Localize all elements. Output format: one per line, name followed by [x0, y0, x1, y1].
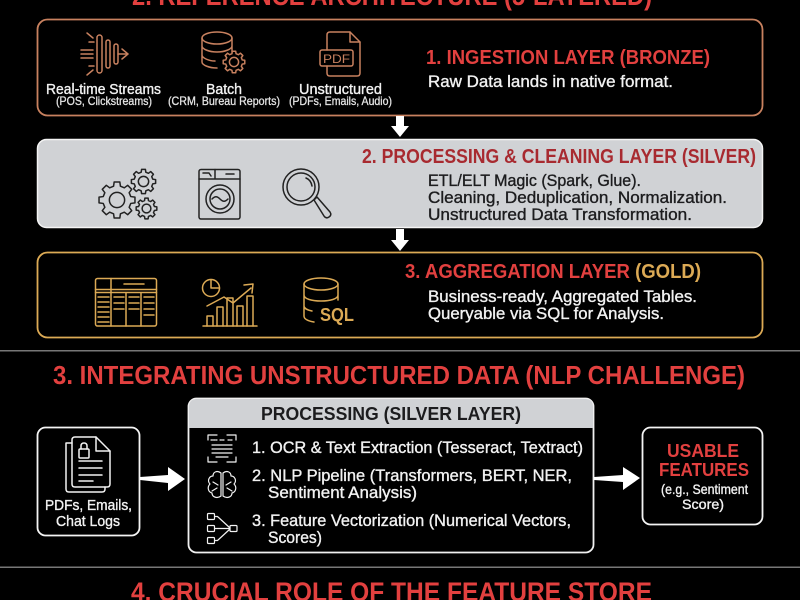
- example: sentiment score: [661, 481, 748, 512]
- step: ocr: 1. OCR & Text Extraction (Tesseract, Textract): [252, 439, 583, 457]
- step: nlp pipeline: 2. NLP Pipeline (Transformers, BERT, NER,: [252, 467, 572, 485]
- icon: gears: [99, 169, 157, 219]
- title: processing and cleaning layer: 2. PROCESSING & CLEANING LAYER (SILVER): [362, 146, 756, 168]
- title: usable features: FEATURES: [659, 459, 749, 480]
- step: feature vectorization: Scores): [268, 529, 322, 547]
- icon: growth chart: [202, 280, 257, 326]
- header text: PROCESSING (SILVER LAYER): [261, 403, 521, 424]
- arrow: ingestion to processing: [391, 116, 409, 137]
- heading: integrating unstructured data: 3. INTEGRATING UNSTRUCTURED DATA (NLP CHALLENGE): [53, 360, 745, 390]
- icon text: pdf: PDF: [323, 52, 350, 66]
- step: feature vectorization: 3. Feature Vectorization (Numerical Vectors,: [252, 512, 571, 530]
- panel: aggregation layer: [38, 252, 762, 338]
- title: usable features: USABLE: [667, 440, 739, 461]
- panel: usable features: [642, 428, 762, 524]
- arrow: processing to features: [594, 467, 640, 490]
- arrow: processing to aggregation: [391, 229, 409, 251]
- description: aggregation layer: [428, 288, 697, 323]
- header bar: [189, 399, 593, 428]
- title: ingestion layer: 1. INGESTION LAYER (BRONZE): [426, 47, 710, 69]
- step: nlp pipeline: [252, 467, 572, 502]
- icon: sql database: [304, 278, 338, 322]
- icon: pdf document: [320, 32, 360, 76]
- description: aggregation layer: Business-ready, Aggregated Tables.: [428, 288, 697, 306]
- sublabel: batch: (CRM, Bureau Reports): [168, 94, 280, 108]
- step: feature vectorization: [252, 512, 571, 547]
- icon: batch database with gear: [202, 32, 245, 73]
- description: processing and cleaning layer: ETL/ELT Magic (Spark, Glue).: [428, 172, 641, 190]
- label: source documents: PDFs, Emails,: [45, 498, 132, 514]
- panel: source documents: [38, 428, 140, 536]
- title: usable features: [659, 440, 749, 480]
- example: sentiment score: Score): [682, 496, 724, 512]
- description: ingestion layer: Raw Data lands in native format.: [428, 73, 673, 91]
- icon: washing machine: [199, 170, 240, 219]
- icon: real-time streams: [81, 33, 128, 75]
- label: real-time streams: Real-time Streams: [46, 82, 161, 98]
- arrow: sources to processing: [140, 467, 185, 491]
- example: sentiment score: (e.g., Sentiment: [661, 481, 748, 497]
- label: batch: Batch: [206, 82, 242, 98]
- description: processing and cleaning layer: Cleaning, Deduplication, Normalization.: [428, 189, 727, 207]
- title: aggregation layer: 3. AGGREGATION LAYER (GOLD): [405, 261, 701, 283]
- panel: ingestion layer: [38, 20, 762, 116]
- icon: brain: [208, 472, 236, 497]
- sublabel: real-time streams: (POS, Clickstreams): [56, 94, 152, 108]
- icon: ocr scan: [208, 435, 236, 462]
- icon: magnifying glass: [283, 169, 331, 218]
- description: processing and cleaning layer: [428, 172, 727, 224]
- icon: locked document: [66, 437, 110, 492]
- label: unstructured: Unstructured: [299, 82, 382, 98]
- label: source documents: Chat Logs: [56, 514, 120, 530]
- panel: processing silver layer: [188, 398, 594, 552]
- sublabel: unstructured: (PDFs, Emails, Audio): [289, 94, 392, 108]
- description: aggregation layer: Queryable via SQL for Analysis.: [428, 305, 664, 323]
- label: source documents: [45, 498, 132, 530]
- icon text: sql: SQL: [320, 305, 354, 325]
- icon: vector network: [208, 514, 237, 544]
- description: processing and cleaning layer: Unstructured Data Transformation.: [428, 206, 692, 224]
- icon: table: [96, 278, 156, 326]
- panel: processing and cleaning layer: [38, 140, 762, 228]
- step: nlp pipeline: Sentiment Analysis): [268, 484, 417, 502]
